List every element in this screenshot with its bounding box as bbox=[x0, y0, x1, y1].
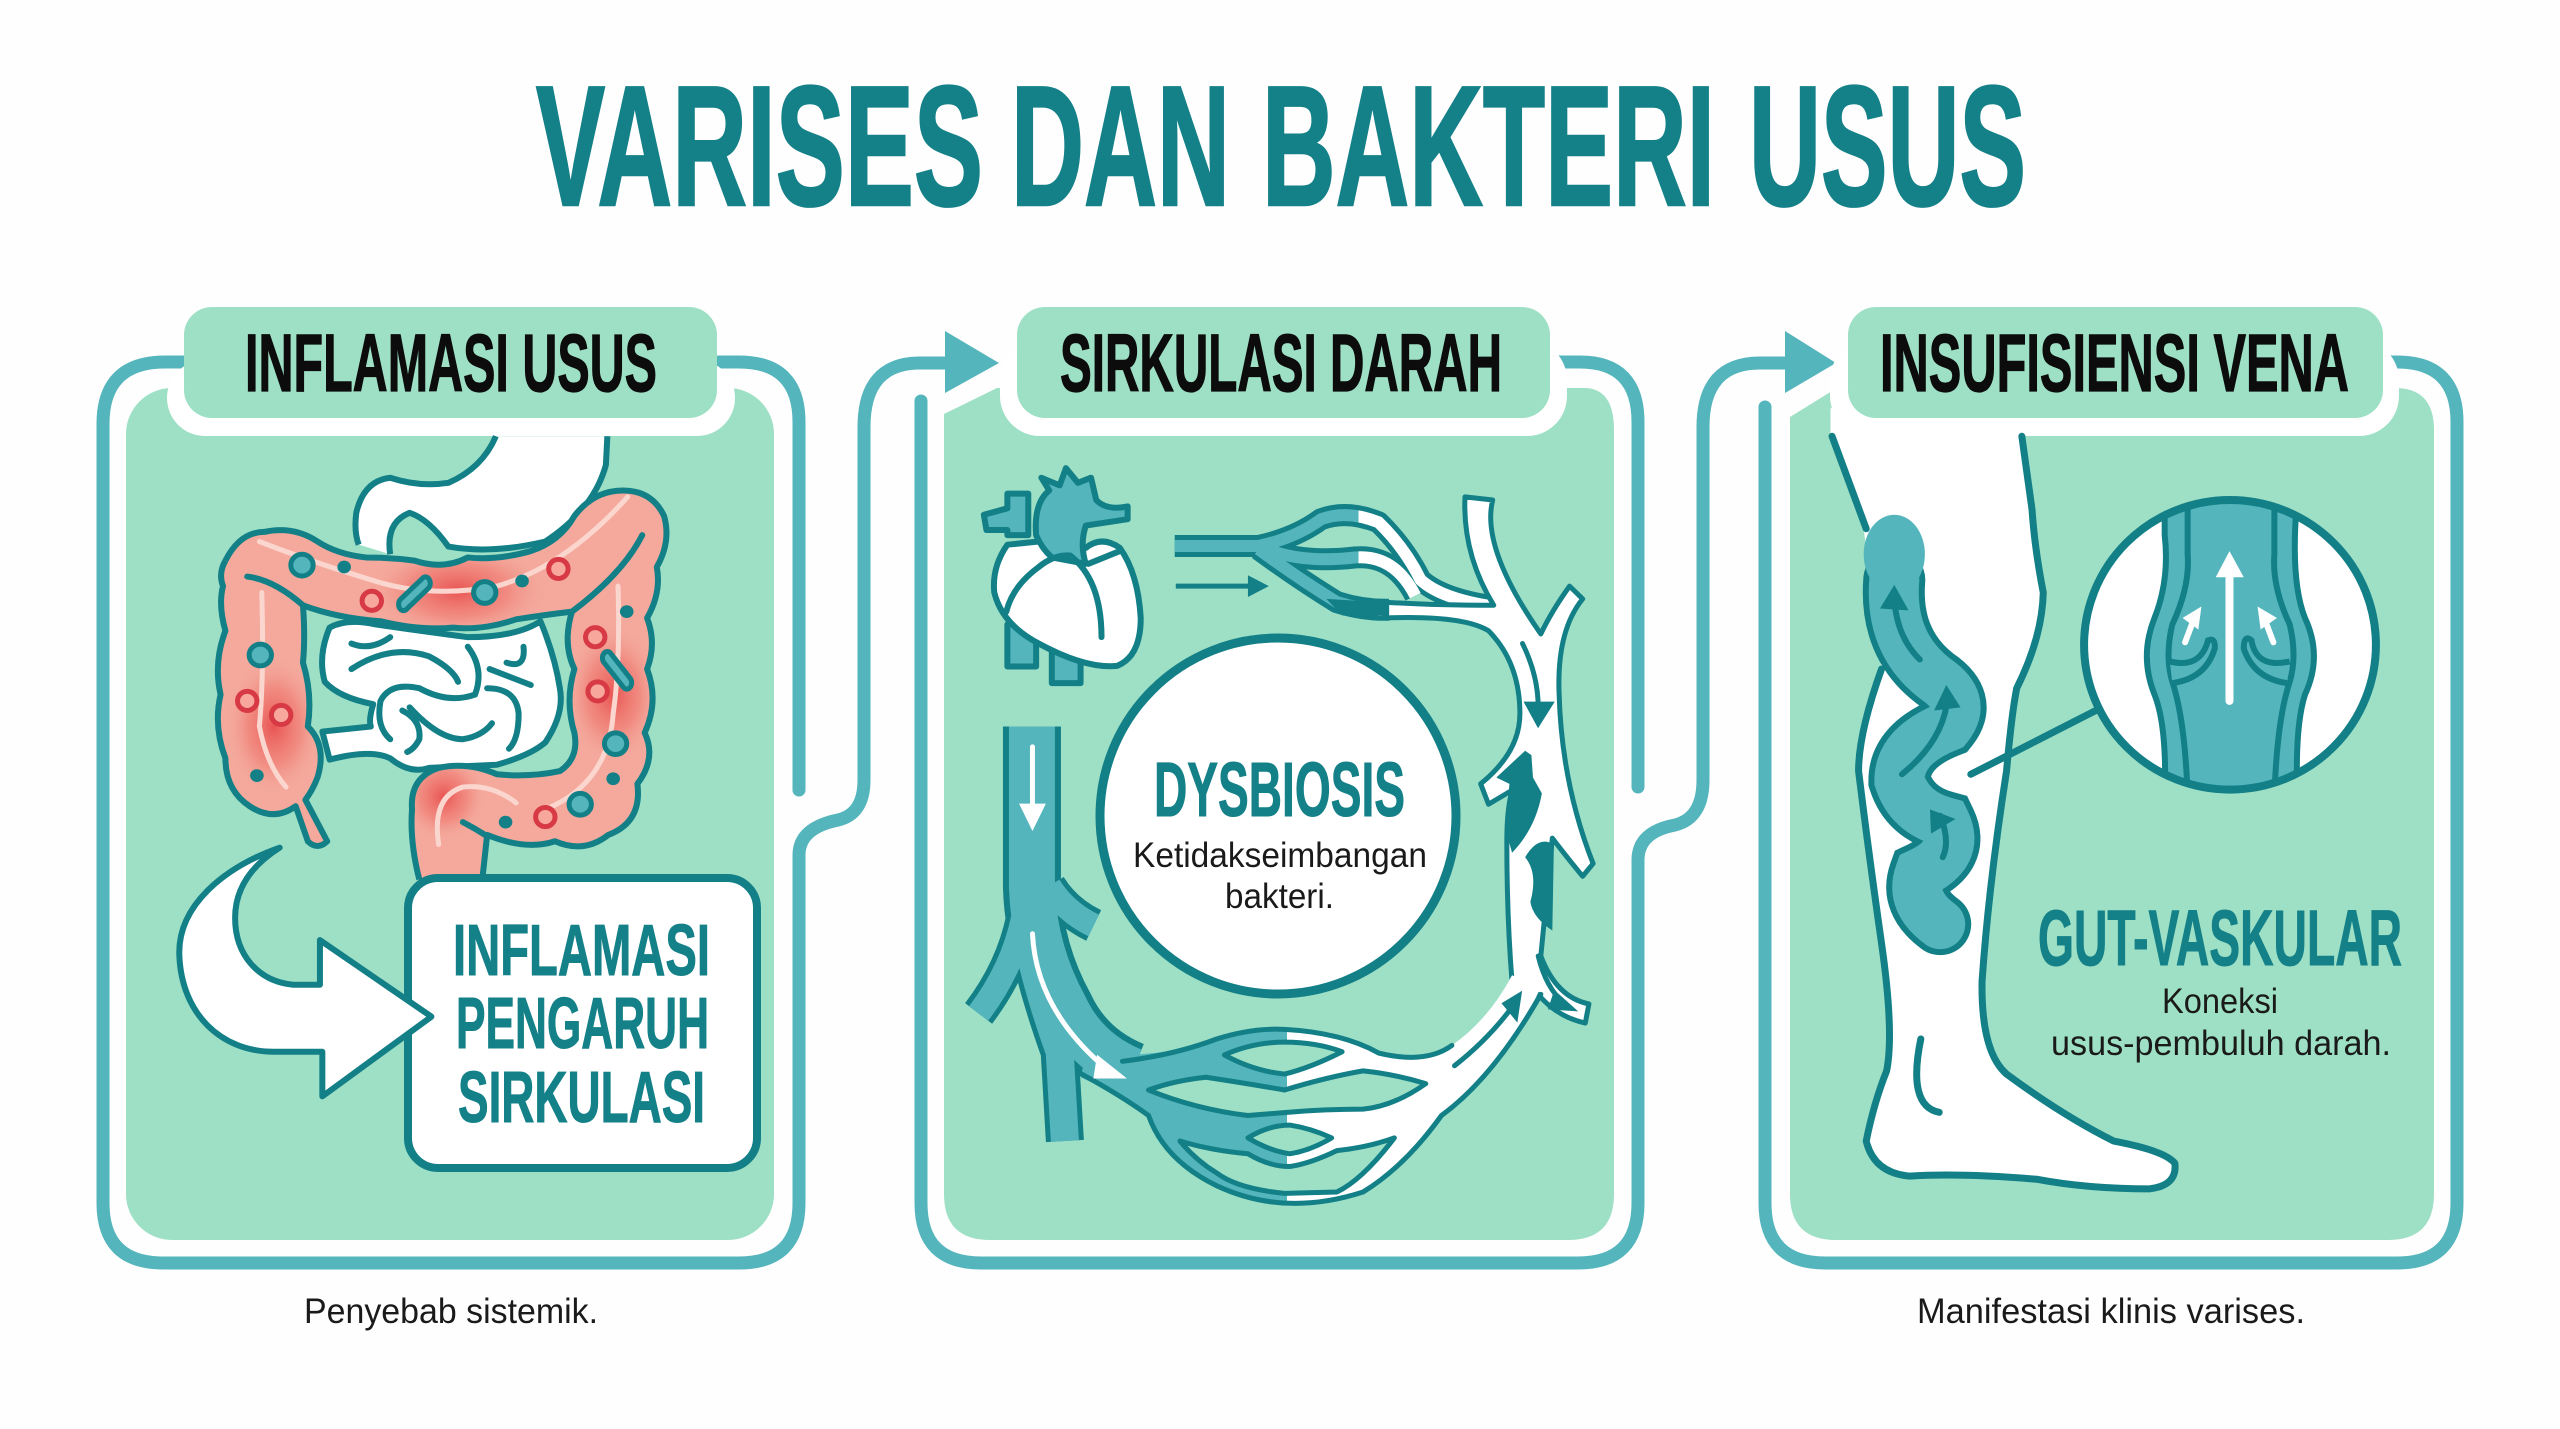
text: gut-vaskular bbox=[2038, 893, 2402, 1063]
left vein outline bbox=[979, 726, 1133, 1141]
title: BAKTERI bbox=[1262, 51, 1715, 242]
arrow: top flow bbox=[1176, 575, 1269, 597]
title: VARISES bbox=[536, 51, 983, 242]
arrows: right vein flow bbox=[1523, 644, 1571, 1008]
caption: panel 3: Manifestasi klinis varises. bbox=[1917, 1292, 2305, 1331]
illustration: leg with varicose vein bbox=[1831, 408, 2376, 1189]
panel frame and connector arrow 1 bbox=[103, 331, 999, 1263]
icon: heart bbox=[984, 468, 1141, 683]
arrow: curved white arrow to callout bbox=[179, 848, 431, 1096]
blood clot blobs bbox=[1496, 751, 1554, 931]
bacteria and inflammation markers bbox=[238, 554, 634, 829]
icon: digestive tract bbox=[218, 436, 666, 880]
circle: dysbiosis: DYSBIOSIS bbox=[1154, 747, 1405, 833]
magnified vein valve bbox=[2084, 497, 2376, 797]
small intestine bbox=[322, 621, 561, 770]
top artery outlines bbox=[1175, 515, 1494, 610]
heading tab bbox=[184, 307, 717, 418]
circle: dysbiosis bbox=[1100, 638, 1456, 994]
capillary mesh bbox=[1081, 975, 1541, 1203]
callout box: inflamasi pengaruh sirkulasi: PENGARUH bbox=[456, 984, 709, 1064]
heading: SIRKULASI DARAH bbox=[1060, 318, 1502, 409]
stomach bbox=[355, 436, 607, 554]
diagram: circulation vessels bbox=[979, 468, 1593, 1203]
arrows: left vein flow bbox=[1023, 747, 1120, 1076]
caption: panel 1: Penyebab sistemik. bbox=[304, 1292, 598, 1331]
top artery fill bbox=[1175, 515, 1494, 610]
text: gut-vaskular: usus-pembuluh darah. bbox=[2051, 1024, 2391, 1063]
panel: sirkulasi darah bbox=[921, 307, 1836, 1263]
arrow: lower right flow bbox=[1455, 996, 1519, 1066]
panel background bbox=[126, 388, 774, 1240]
heading tab bbox=[1017, 307, 1550, 418]
title: USUS bbox=[1749, 51, 2026, 242]
heading tab halo bbox=[167, 360, 735, 436]
callout box: inflamasi pengaruh sirkulasi: INFLAMASI bbox=[453, 911, 710, 991]
panel background bbox=[1790, 388, 2434, 1240]
text: gut-vaskular: Koneksi bbox=[2162, 982, 2278, 1021]
panel background bbox=[944, 388, 1614, 1240]
circle: dysbiosis: Ketidakseimbangan bbox=[1133, 836, 1427, 875]
left vein fill bbox=[979, 726, 1133, 1141]
heading tab halo bbox=[1000, 340, 1567, 436]
heading: INFLAMASI USUS bbox=[245, 318, 657, 409]
panel: inflamasi usus bbox=[103, 307, 999, 1263]
right vein bbox=[1326, 497, 1593, 1023]
varicose vein bbox=[1864, 515, 1961, 924]
leg bbox=[1831, 408, 2175, 1189]
heading tab bbox=[1848, 307, 2383, 418]
panel frame and connector arrow 2 bbox=[921, 331, 1836, 1263]
title bbox=[536, 51, 2026, 242]
callout box: inflamasi pengaruh sirkulasi: SIRKULASI bbox=[458, 1058, 705, 1138]
callout line bbox=[1971, 711, 2096, 774]
large intestine bbox=[218, 490, 666, 880]
panel: insufisiensi vena bbox=[1765, 307, 2457, 1263]
arrows: valve flow bbox=[2183, 551, 2277, 701]
title: DAN bbox=[1011, 51, 1230, 242]
panel frame bbox=[1765, 362, 2457, 1263]
heading tab halo bbox=[1830, 340, 2399, 436]
callout box: inflamasi pengaruh sirkulasi bbox=[408, 878, 757, 1168]
circle: dysbiosis: bakteri. bbox=[1225, 877, 1334, 916]
